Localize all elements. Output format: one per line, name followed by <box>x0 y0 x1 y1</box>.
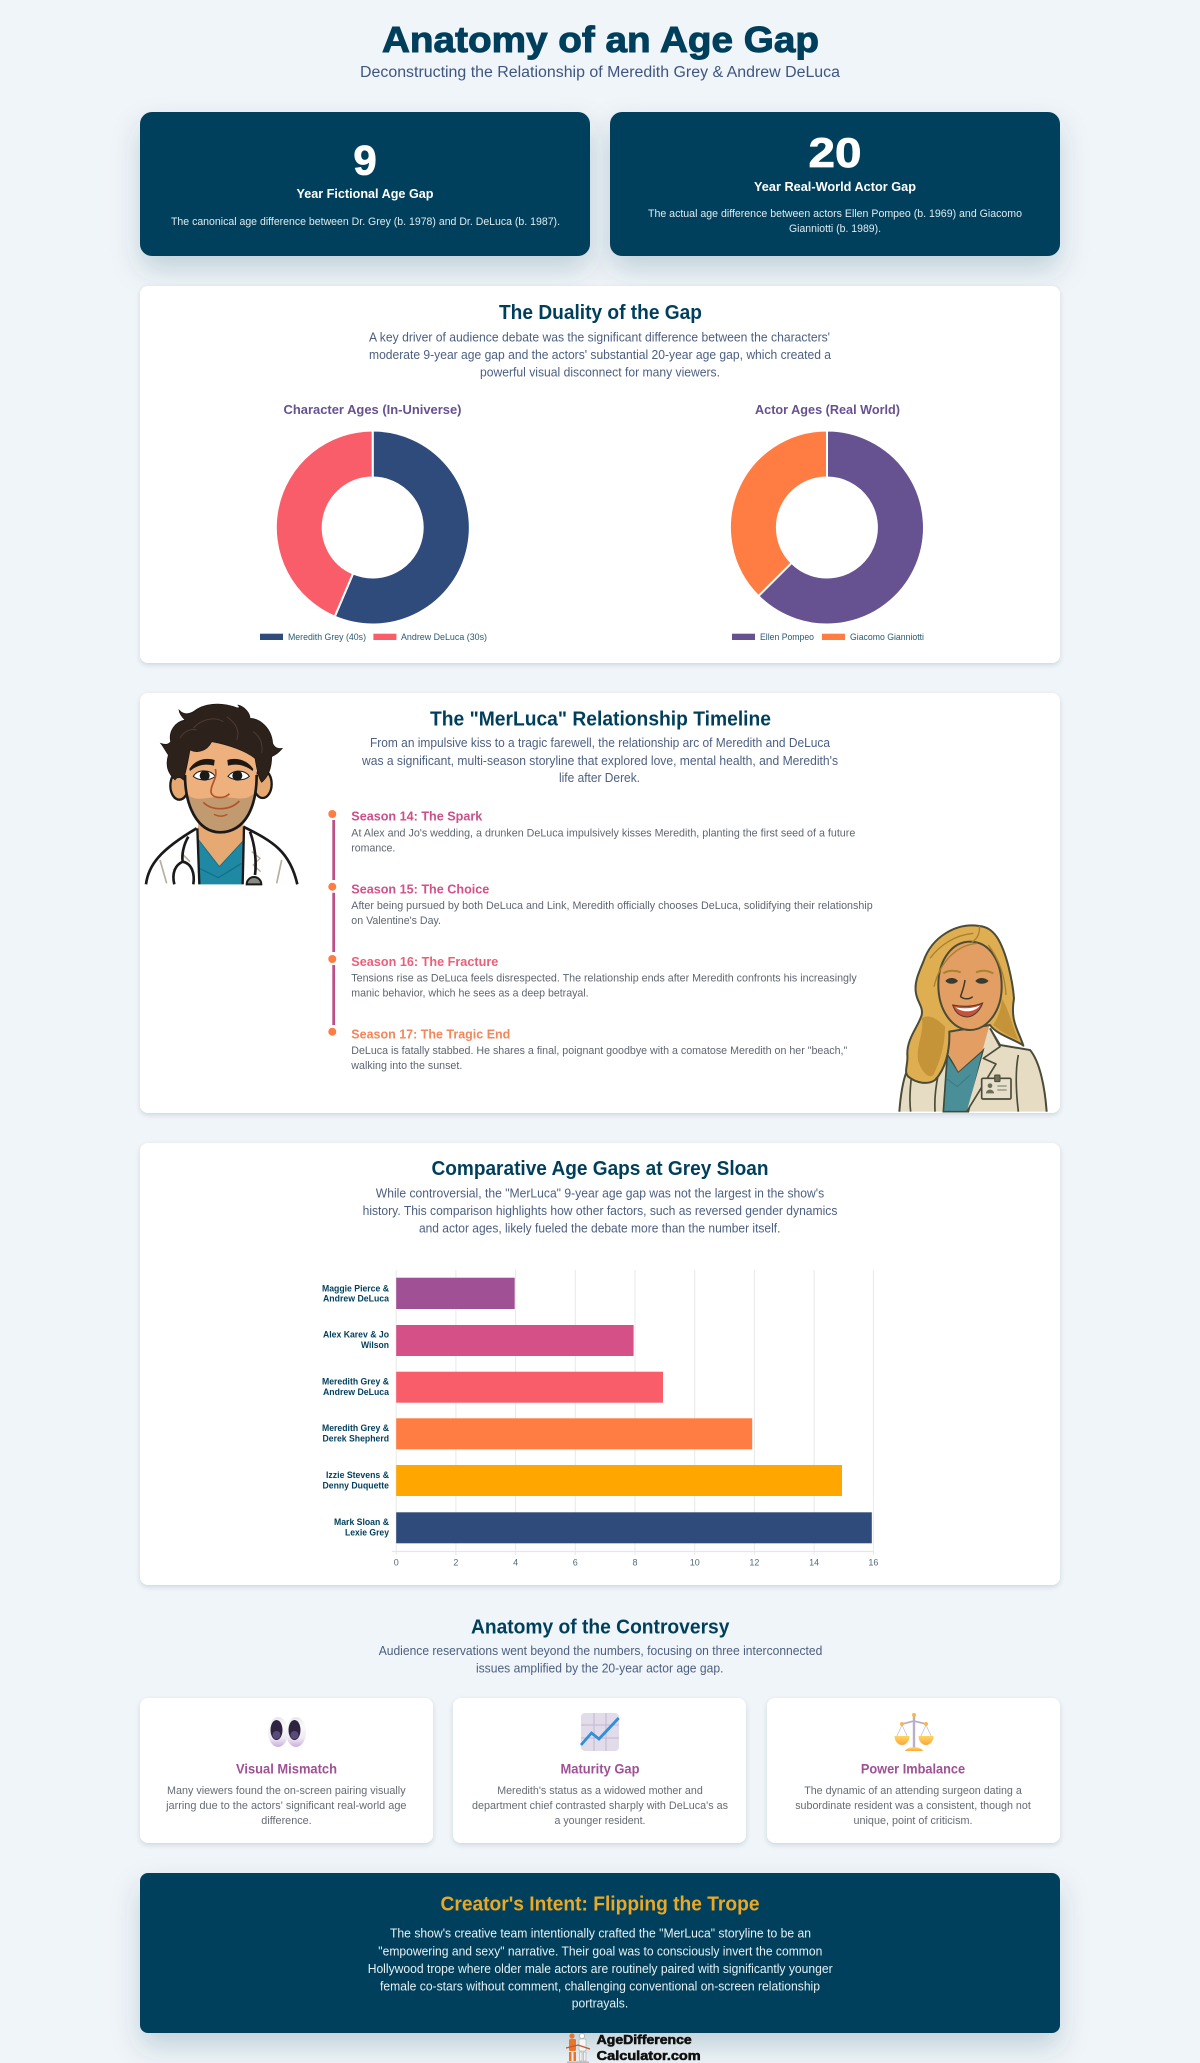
card text: jarring due to the actors' significant real-world age <box>165 1800 406 1812</box>
logo text: Calculator.com <box>597 2049 701 2063</box>
section intro: controversy <box>379 1643 822 1676</box>
timeline item: season 16: manic behavior, which he sees as a deep betrayal. <box>351 988 589 1000</box>
category labels: Meredith Grey & <box>322 1423 389 1433</box>
axis ticks: 12 <box>749 1558 759 1568</box>
panel: relationship timeline <box>140 693 1060 1113</box>
subtitle: Deconstructing the Relationship of Meredith Grey & Andrew DeLuca <box>360 64 840 81</box>
intro text <box>363 1186 838 1235</box>
timeline item: season 17: walking into the sunset. <box>350 1060 462 1072</box>
category labels: Andrew DeLuca <box>323 1294 390 1304</box>
body text: The show's creative team intentionally crafted the "MerLuca" storyline to be an <box>390 1927 811 1941</box>
category labels: Alex Karev & Jo <box>323 1330 389 1340</box>
intro text: history. This comparison highlights how other factors, such as reversed gender dynamics <box>363 1203 838 1218</box>
illustration: male doctor <box>146 704 297 884</box>
axis ticks: 14 <box>809 1558 819 1568</box>
timeline item: season 14 <box>351 809 855 855</box>
heading: The "MerLuca" Relationship Timeline <box>430 709 771 731</box>
card: maturity gap <box>453 1698 746 1843</box>
stat number 20: 20 <box>808 129 862 176</box>
heading: The Duality of the Gap <box>499 302 702 324</box>
legend: character ages: Andrew DeLuca (30s) <box>401 632 487 643</box>
heading: Comparative Age Gaps at Grey Sloan <box>432 1158 768 1180</box>
timeline item: season 17: DeLuca is fatally stabbed. He shares a final, poignant goodbye with a comatose Meredith on her "beach," <box>351 1045 847 1057</box>
card text: department chief contrasted sharply with DeLuca's as <box>472 1800 728 1812</box>
category labels: Maggie Pierce & <box>322 1283 389 1293</box>
bar chart <box>322 1270 878 1568</box>
timeline item: season 16: Season 16: The Fracture <box>351 954 498 969</box>
legend: actor ages <box>732 632 924 643</box>
timeline spine <box>328 810 336 1036</box>
icon: eyes <box>268 1717 306 1747</box>
timeline item: season 17: Season 17: The Tragic End <box>351 1026 510 1041</box>
body text: Hollywood trope where older male actors are routinely paired with significantly younger <box>368 1962 833 1976</box>
body text: portrayals. <box>572 1997 628 2011</box>
heading: Creator's Intent: Flipping the Trope <box>440 1894 760 1916</box>
stat description: Gianniotti (b. 1989). <box>789 223 881 235</box>
timeline item: season 15: Season 15: The Choice <box>351 881 489 896</box>
logo: AgeDifference Calculator <box>566 2033 701 2063</box>
stat description: The canonical age difference between Dr. Grey (b. 1978) and Dr. DeLuca (b. 1987). <box>171 216 560 228</box>
category labels: Derek Shepherd <box>322 1434 389 1444</box>
panel: duality of the gap <box>140 286 1060 663</box>
axis ticks: 16 <box>868 1558 878 1568</box>
category labels: Wilson <box>361 1340 389 1350</box>
chart heading: actor ages: Actor Ages (Real World) <box>755 402 900 417</box>
card text <box>472 1785 728 1827</box>
timeline item: season 15 <box>351 881 873 927</box>
intro text: powerful visual disconnect for many viewers. <box>480 365 720 380</box>
donut chart: character ages <box>276 430 470 624</box>
bars <box>396 1278 872 1543</box>
category labels: Izzie Stevens & <box>326 1470 389 1480</box>
panel: comparative age gaps <box>140 1143 1060 1585</box>
category labels: Andrew DeLuca <box>323 1387 390 1397</box>
card text: subordinate resident was a consistent, though not <box>795 1800 1031 1812</box>
section heading: controversy: Anatomy of the Controversy <box>471 1616 730 1638</box>
axis ticks <box>394 1558 878 1568</box>
illustration: female doctor <box>899 925 1047 1112</box>
title: Anatomy of an Age Gap <box>382 19 819 60</box>
stat number 9: 9 <box>353 136 377 184</box>
intro text: life after Derek. <box>559 770 640 785</box>
card: power imbalance <box>767 1698 1060 1843</box>
axis ticks: 8 <box>632 1558 638 1568</box>
category labels: Mark Sloan & <box>334 1517 389 1527</box>
category labels: Denny Duquette <box>322 1480 389 1490</box>
category labels: Meredith Grey & <box>322 1377 389 1387</box>
logo text <box>597 2033 701 2063</box>
legend: character ages <box>260 632 487 643</box>
axis ticks: 4 <box>513 1558 518 1568</box>
timeline item: season 14: At Alex and Jo's wedding, a drunken DeLuca impulsively kisses Meredith, planting the first seed of a future <box>351 828 855 840</box>
axis ticks: 0 <box>394 1558 399 1568</box>
timeline item: season 15: on Valentine's Day. <box>351 915 441 927</box>
intro text: While controversial, the "MerLuca" 9-year age gap was not the largest in the show's <box>376 1186 825 1201</box>
stat label: Year Real-World Actor Gap <box>754 179 916 194</box>
card title: Visual Mismatch <box>236 1760 337 1776</box>
body text <box>368 1927 833 2011</box>
logo text: AgeDifference <box>597 2033 692 2047</box>
card text <box>795 1785 1031 1827</box>
axis ticks: 2 <box>453 1558 458 1568</box>
body text: female co-stars without comment, challenging conventional on-screen relationship <box>380 1979 820 1993</box>
intro text <box>361 735 838 785</box>
card title: Power Imbalance <box>861 1760 965 1776</box>
intro text <box>369 330 832 380</box>
stat description <box>648 208 1022 235</box>
legend: actor ages: Ellen Pompeo <box>760 632 814 643</box>
intro text: From an impulsive kiss to a tragic farewell, the relationship arc of Meredith and DeLuca <box>370 735 831 750</box>
timeline item: season 16: Tensions rise as DeLuca feels disrespected. The relationship ends after Meredith confronts his increasingly <box>351 973 857 985</box>
timeline item: season 17 <box>350 1026 847 1072</box>
stat card: fictional gap <box>140 112 590 256</box>
card text: unique, point of criticism. <box>854 1815 972 1827</box>
card text: Many viewers found the on-screen pairing visually <box>167 1785 406 1797</box>
timeline item: season 16 <box>351 954 857 1000</box>
logo icon <box>566 2033 590 2063</box>
chart heading: character ages: Character Ages (In-Universe) <box>284 402 462 417</box>
card title: Maturity Gap <box>560 1760 640 1776</box>
card text: Meredith's status as a widowed mother and <box>497 1785 703 1797</box>
section intro: controversy: Audience reservations went beyond the numbers, focusing on three interconnected <box>379 1643 822 1658</box>
timeline item: season 15: After being pursued by both DeLuca and Link, Meredith officially chooses DeLuca, solidifying their relationship <box>351 900 873 912</box>
axis ticks: 10 <box>690 1558 700 1568</box>
stat card: real-world gap <box>610 112 1060 256</box>
stat label: Year Fictional Age Gap <box>296 186 434 201</box>
card: visual mismatch <box>140 1698 433 1843</box>
timeline item: season 14: romance. <box>351 843 395 855</box>
category labels <box>322 1283 390 1537</box>
stat description: The actual age difference between actors Ellen Pompeo (b. 1969) and Giacomo <box>648 208 1022 220</box>
icon: scales <box>894 1713 934 1751</box>
intro text: was a significant, multi-season storyline that explored love, mental health, and Meredith's <box>361 753 838 768</box>
axis ticks: 6 <box>573 1558 578 1568</box>
donut chart: actor ages <box>730 430 924 624</box>
legend: character ages: Meredith Grey (40s) <box>288 632 366 643</box>
intro text: moderate 9-year age gap and the actors' substantial 20-year age gap, which created a <box>369 347 832 362</box>
body text: "empowering and sexy" narrative. Their goal was to consciously invert the common <box>378 1944 822 1958</box>
card text: difference. <box>261 1815 312 1827</box>
panel: creator's intent <box>140 1873 1060 2033</box>
timeline item: season 14: Season 14: The Spark <box>351 809 483 824</box>
intro text: and actor ages, likely fueled the debate more than the number itself. <box>419 1220 780 1235</box>
intro text: A key driver of audience debate was the significant difference between the characters' <box>369 330 830 345</box>
section intro: controversy: issues amplified by the 20-year actor age gap. <box>476 1661 723 1676</box>
category labels: Lexie Grey <box>345 1527 389 1537</box>
card text: a younger resident. <box>554 1815 646 1827</box>
icon: chart <box>581 1713 619 1751</box>
card text <box>165 1785 406 1827</box>
legend: actor ages: Giacomo Gianniotti <box>850 632 924 643</box>
card text: The dynamic of an attending surgeon dating a <box>804 1785 1023 1797</box>
timeline markers <box>328 810 336 1036</box>
